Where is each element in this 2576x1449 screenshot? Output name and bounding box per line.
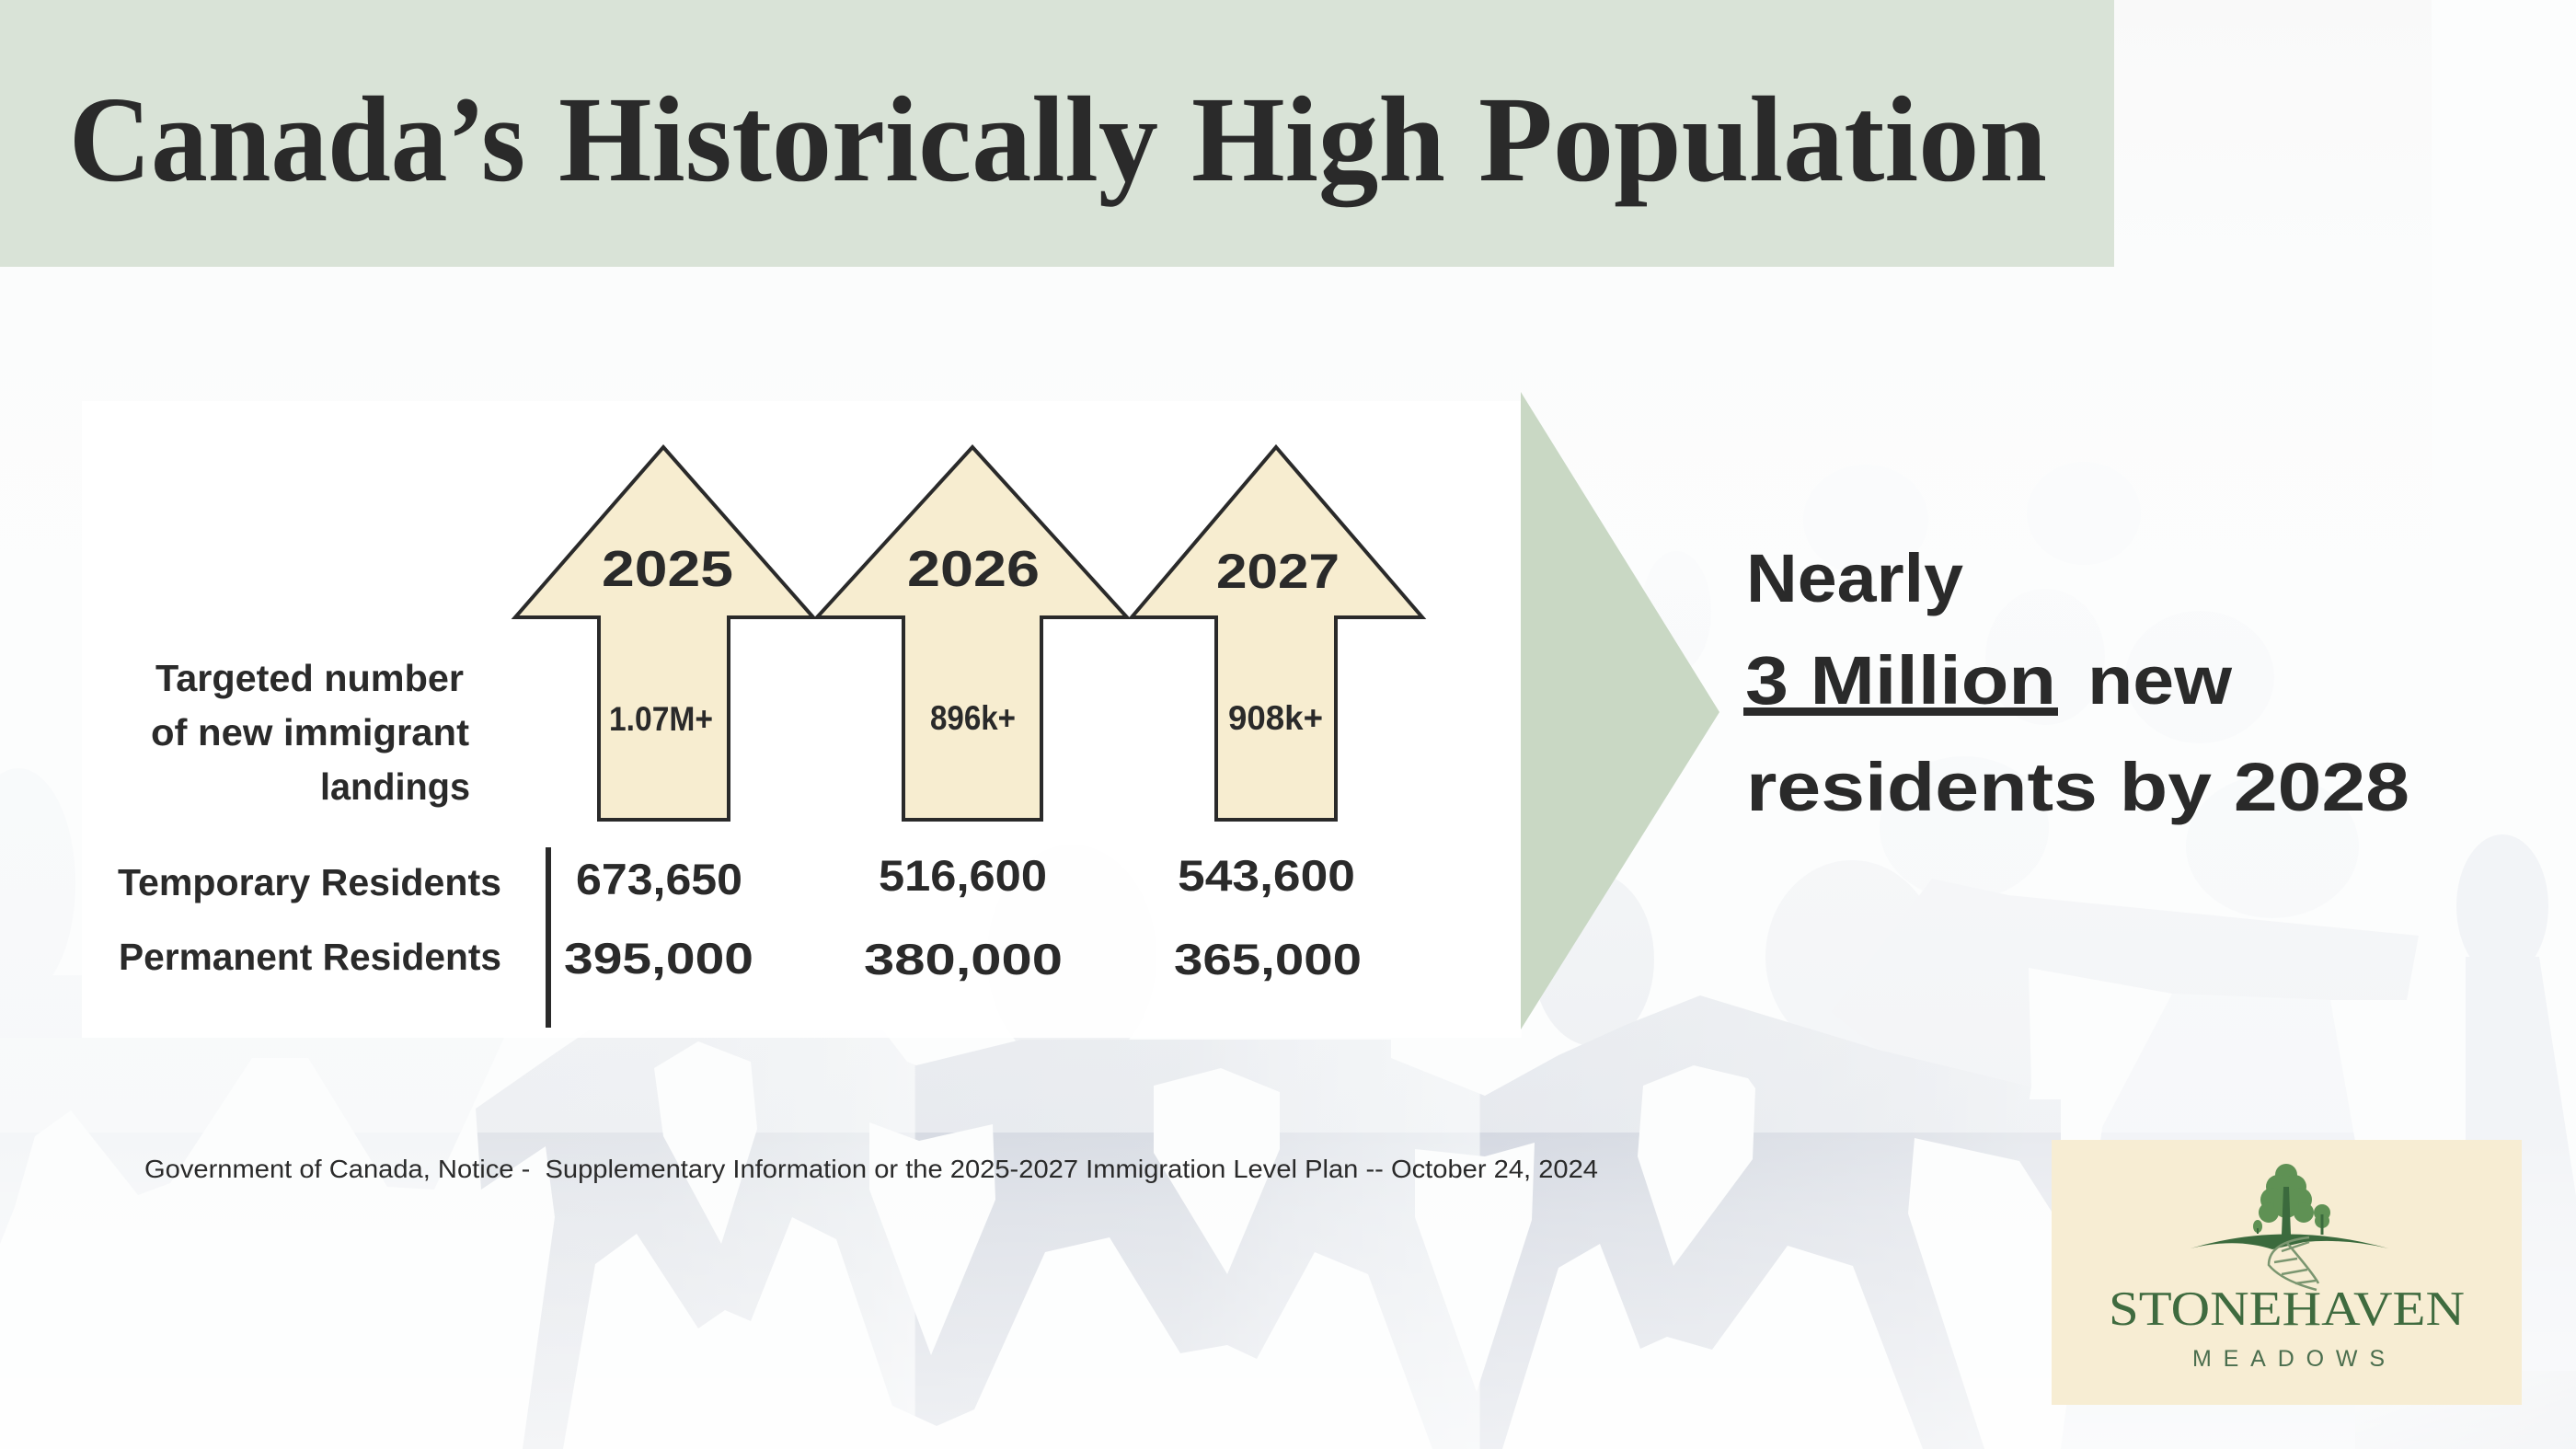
arrow: 2026 [817,447,1127,820]
table values: permanent residents [564,934,1362,983]
title banner [0,0,2114,267]
callout: nearly 3 million new residents: residents by 2028 [1746,749,2409,825]
table values: temporary residents: 516,600 [879,851,1047,900]
table values: temporary residents: 673,650 [576,855,742,903]
table row labels [118,861,501,978]
table values: permanent residents: 380,000 [864,935,1063,983]
logo: Stonehaven Meadows [2052,1140,2522,1405]
table values: temporary residents: 543,600 [1178,851,1355,900]
row label: targeted landings: Targeted number [155,657,464,699]
callout: nearly 3 million new residents: 3 Million [1745,642,2056,719]
table values: permanent residents: 395,000 [564,934,753,983]
title: High [1191,71,1445,207]
table values: temporary residents [576,851,1355,903]
panel: white table backing [82,401,1522,1038]
arrow: 2025: 2025 [602,540,733,597]
title: Population [1478,71,2047,207]
arrow: 2027: 2027 [1216,545,1340,599]
callout: nearly 3 million new residents [1743,540,2409,825]
callout: nearly 3 million new residents: Nearly [1746,540,1963,616]
icon: trees on hill [2191,1164,2388,1290]
bottom-right corner shade [2355,1371,2576,1449]
logo: Stonehaven Meadows: STONEHAVEN [2109,1282,2465,1336]
table row labels: Temporary Residents [118,861,501,903]
row label: targeted landings [151,657,470,808]
arrow: 2027: 908k+ [1228,699,1323,737]
title: Historically [558,71,1158,207]
table divider [546,847,551,1028]
arrow: 2027 [1132,447,1422,820]
figure C arm and torso [1831,879,2419,1087]
bottom fade [0,1133,2576,1449]
arrow: green triangle [1521,392,1719,1029]
row label: targeted landings: of new immigrant [151,711,469,753]
source note: Government of Canada, Notice - Supplementary Information or the 2025-2027 Immigration Level Plan -- October 24, 2024 [144,1155,1598,1183]
table row labels: Permanent Residents [119,936,501,978]
left faint figures [0,1038,504,1244]
arrow: 2025: 1.07M+ [609,700,713,738]
title: Canada’s [69,71,525,207]
front chain of paper dolls [476,995,2031,1449]
logo: Stonehaven Meadows: MEADOWS [2192,1346,2385,1372]
figure C leg [2019,1099,2061,1224]
title [69,71,2047,207]
back row heads and bodies [0,462,2576,1449]
top veil [0,0,2432,1133]
callout: nearly 3 million new residents: new [2087,642,2232,719]
arrow: 2026: 2026 [907,540,1040,597]
table values: permanent residents: 365,000 [1174,935,1362,983]
arrow: 2025 [515,447,813,820]
arrow: 2026: 896k+ [930,699,1016,737]
row label: targeted landings: landings [320,765,470,808]
front figure heads [987,845,1654,1069]
